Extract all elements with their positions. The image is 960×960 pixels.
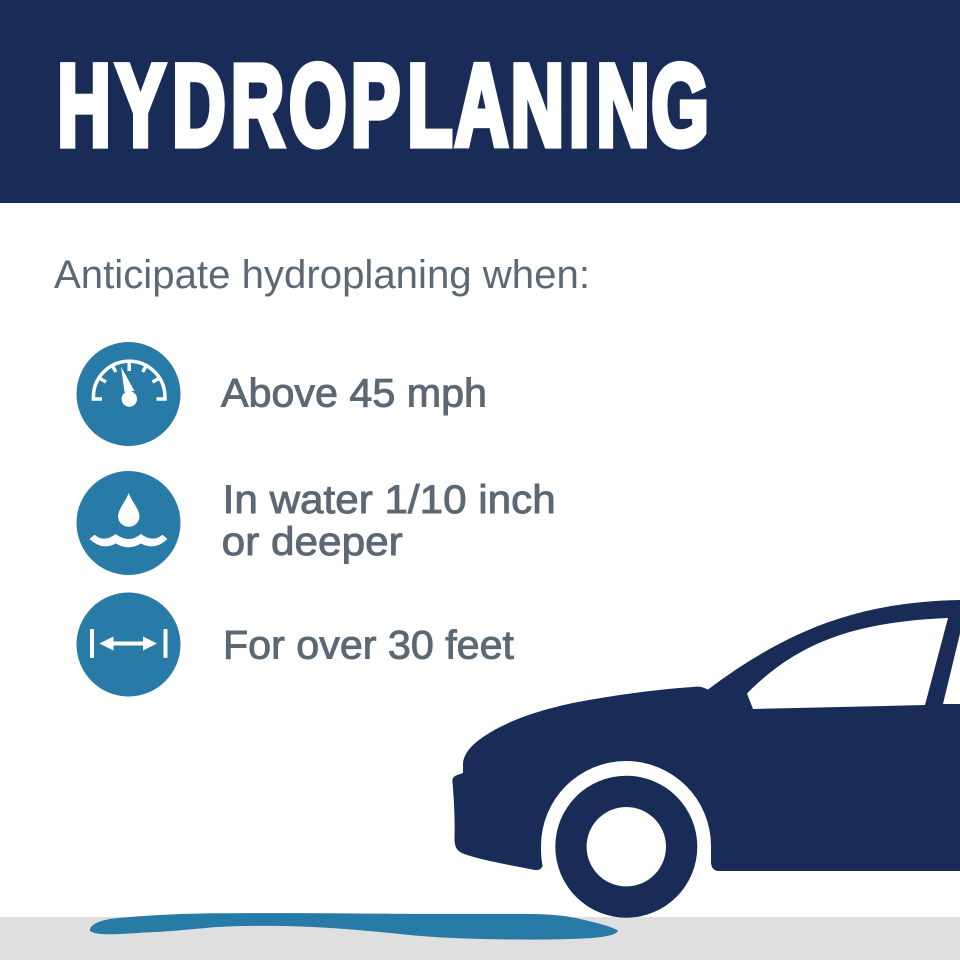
icon: speedometer: [76, 342, 180, 446]
label: speed: Above 45 mph: [221, 372, 487, 416]
icon: distance arrow: [76, 592, 180, 696]
icon: water drop and waves: [76, 471, 180, 575]
car: [452, 600, 960, 918]
water puddle: [90, 913, 618, 940]
car body: [452, 600, 960, 871]
label: water depth: or deeper: [222, 520, 403, 564]
road: [0, 917, 960, 960]
front wheel: [555, 776, 697, 918]
title: HYDROPLANING: [57, 43, 709, 170]
label: water depth: In water 1/10 inch: [223, 478, 556, 522]
intro text: Anticipate hydroplaning when:: [54, 253, 590, 297]
title banner: [0, 0, 960, 203]
label: distance: For over 30 feet: [223, 624, 514, 668]
condition: speed: [76, 342, 487, 446]
condition: water depth: [76, 471, 556, 575]
label: water depth: [222, 478, 556, 564]
condition: distance: [76, 592, 514, 696]
